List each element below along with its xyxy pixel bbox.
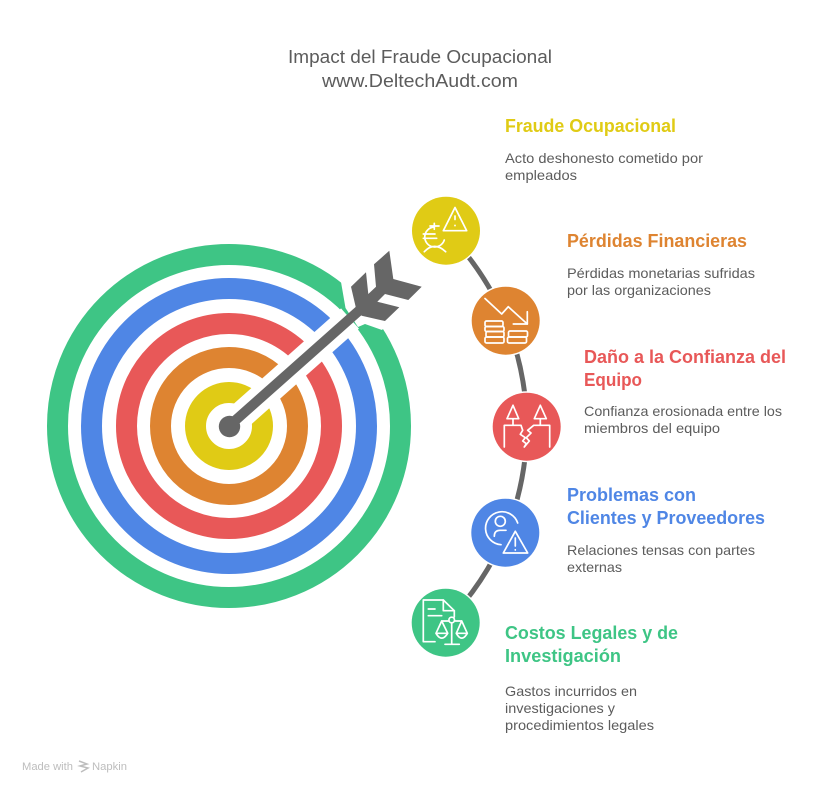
text block: costos legales: Gastos incurridos en <box>505 683 637 699</box>
icon: falling chart and coins <box>485 298 528 343</box>
text block: problemas con clientes: Relaciones tensas con partes <box>567 542 755 558</box>
ring: yellow <box>196 392 262 460</box>
icon: broken trust <box>504 405 550 447</box>
connector arc <box>446 231 527 623</box>
ring: orange <box>160 358 298 494</box>
icon: person warning <box>486 512 528 553</box>
watermark: Made with <box>22 761 73 773</box>
text block: problemas con clientes: Problemas con <box>567 485 696 505</box>
text block: dano a la confianza <box>584 347 786 436</box>
ring: red <box>126 324 332 528</box>
icon: document and scales <box>423 600 467 644</box>
icon: euro person warning <box>423 208 467 252</box>
text block: costos legales: Costos Legales y de <box>505 623 678 643</box>
target chart <box>58 251 422 597</box>
arrow <box>219 251 422 437</box>
ring: green <box>58 254 400 598</box>
text block: perdidas financieras: por las organizaciones <box>567 282 711 298</box>
text block: costos legales: Investigación <box>505 646 621 666</box>
text block: costos legales: investigaciones y <box>505 700 615 716</box>
text block: dano a la confianza: miembros del equipo <box>584 420 720 436</box>
ring: blue <box>92 288 366 564</box>
text block: problemas con clientes <box>567 485 765 575</box>
text block: problemas con clientes: externas <box>567 559 622 575</box>
text block: dano a la confianza: Equipo <box>584 370 642 390</box>
text block: fraude ocupacional <box>505 116 703 183</box>
text block: costos legales: procedimientos legales <box>505 717 654 733</box>
text block: costos legales <box>505 623 678 733</box>
watermark <box>22 761 127 773</box>
text block: dano a la confianza: Daño a la Confianza del <box>584 347 786 367</box>
node: perdidas financieras <box>470 285 541 356</box>
text block: perdidas financieras: Pérdidas Financieras <box>567 231 747 251</box>
node: problemas con clientes <box>470 497 541 568</box>
text block: fraude ocupacional: Acto deshonesto cometido por <box>505 150 703 166</box>
text block: fraude ocupacional: empleados <box>505 167 577 183</box>
text block: dano a la confianza: Confianza erosionada entre los <box>584 403 782 419</box>
watermark: Napkin <box>92 761 127 773</box>
title: Impact del Fraude Ocupacional <box>288 47 552 67</box>
title: www.DeltechAudt.com <box>321 71 518 91</box>
text block: problemas con clientes: Clientes y Proveedores <box>567 508 765 528</box>
node: fraude ocupacional <box>410 195 482 266</box>
text block: perdidas financieras <box>567 231 755 298</box>
node: dano a la confianza <box>491 391 562 462</box>
text block: fraude ocupacional: Fraude Ocupacional <box>505 116 676 136</box>
text block: perdidas financieras: Pérdidas monetarias sufridas <box>567 265 755 281</box>
node: costos legales <box>410 587 481 658</box>
title <box>288 47 552 91</box>
